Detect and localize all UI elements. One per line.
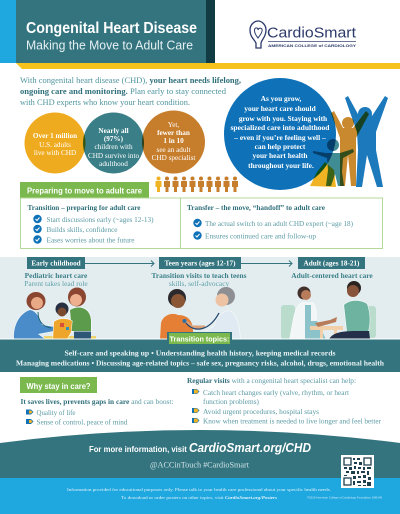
blue callout circle: your heart health	[253, 151, 307, 160]
column: transfer: Transfer – the move, “handoff” to adult care	[187, 203, 325, 212]
intro text	[20, 75, 241, 107]
stat circle: fewer than 1 in 10: see an adult	[157, 146, 190, 154]
topics text	[16, 348, 385, 368]
heading tab: Preparing to move to adult care	[27, 186, 143, 196]
stat circle: nearly all: children with	[94, 143, 133, 151]
illustration: teen and doctor	[160, 287, 240, 339]
blue callout circle: your heart care should	[244, 104, 317, 113]
social handles: @ACCinTouch #CardioSmart	[150, 460, 250, 470]
stage label: adult: Adult (ages 18-21)	[304, 260, 360, 268]
panel: why stay in care: It saves lives, prevents gaps in care and can boost:	[20, 397, 174, 406]
logo: CardioSmart	[250, 21, 356, 48]
family silhouettes	[310, 96, 388, 187]
stat circle: fewer than 1 in 10: Yet,	[168, 121, 179, 129]
logo: CardioSmart: CardioSmart	[267, 26, 356, 42]
stat circle: nearly all: (97%)	[104, 135, 124, 143]
heading tag	[167, 332, 232, 345]
blue callout circle: grow with you. Staying with	[239, 114, 327, 123]
panel: regular visits: Avoid urgent procedures, hospital stays	[203, 407, 319, 416]
column: transfer	[187, 203, 353, 240]
topics text: Managing medications • Discussing age-related topics – safe sex, pregnancy risks, alcohol, drugs, emotional health	[16, 358, 385, 368]
icon row: ten people	[156, 176, 238, 192]
panel: regular visits: Catch heart changes early (valve, rhythm, or heart	[203, 388, 350, 397]
heading tab	[20, 182, 149, 198]
stat circle: over 1 million: U.S. adults	[39, 141, 71, 149]
panel: regular visits: function problems)	[203, 397, 259, 406]
stage text: transition visits	[152, 271, 247, 288]
column: transition: Builds skills, confidence	[46, 225, 118, 234]
orange adult	[331, 111, 369, 186]
stat circle: fewer than 1 in 10: 1 in 10	[163, 137, 184, 145]
stage label: early childhood	[27, 257, 85, 269]
stage label: early childhood: Early childhood	[31, 260, 81, 268]
column: transition	[28, 203, 154, 244]
copyright: ©2026 American College of Cardiology Foundation 26M149	[307, 496, 383, 500]
stat circle: nearly all	[83, 112, 144, 174]
footer panel	[0, 430, 400, 514]
intro text: ongoing care and monitoring. Plan early to stay connected	[20, 86, 227, 96]
heading tag: Why stay in care?	[26, 381, 90, 391]
title: Congenital Heart Disease	[26, 20, 197, 37]
disclaimer: To download or order posters on other topics, visit CardioSmart.org/Posters	[121, 495, 277, 501]
topics text: Self-care and speaking up • Understanding health history, keeping medical records	[64, 348, 336, 358]
panel: regular visits: Know when treatment is needed to live longer and feel better	[203, 416, 381, 426]
heading tag	[20, 377, 97, 393]
column: transition: Start discussions early (~ages 12-13)	[46, 215, 154, 224]
panel: why stay in care: Quality of life	[36, 408, 76, 417]
stage label: adult	[298, 257, 365, 269]
blue callout circle	[224, 78, 336, 190]
illustration: doctor and adult patient	[281, 281, 376, 339]
call to action: For more information, visit CardioSmart.org/CHD	[89, 440, 312, 455]
blue callout circle: – even if you’re feeling well –	[233, 133, 326, 142]
disclaimer	[67, 487, 331, 501]
panel: why stay in care: Sense of control, peace of mind	[36, 418, 128, 426]
panel: why stay in care	[20, 377, 174, 426]
arrow	[85, 260, 154, 266]
stat circle: over 1 million: Over 1 million	[33, 132, 77, 140]
stage text: pediatric: Parent takes lead role	[24, 279, 88, 288]
panel: regular visits	[187, 376, 381, 426]
logo: CardioSmart: AMERICAN COLLEGE of CARDIOLOGY	[268, 43, 356, 48]
yellow toddler	[310, 162, 336, 187]
arrow	[241, 260, 292, 266]
stat circle: nearly all: Nearly all	[98, 127, 129, 135]
stage text: pediatric	[24, 271, 88, 288]
stat circle: nearly all: adulthood	[99, 160, 128, 168]
title	[26, 20, 197, 52]
stat circle: fewer than 1 in 10: CHD specialist	[152, 154, 195, 162]
blue callout circle: specialized care into adulthood	[230, 123, 330, 132]
column: transition: Eases worries about the future	[46, 236, 135, 244]
stage label: teen years: Teen years (ages 12-17)	[164, 260, 236, 268]
panel: transition topics	[0, 332, 400, 372]
blue callout circle: As you grow,	[261, 94, 302, 103]
intro text: With congenital heart disease (CHD), your heart needs lifelong,	[20, 75, 241, 85]
stage text: pediatric: Pediatric heart care	[25, 271, 88, 280]
stage label: teen years	[159, 257, 241, 269]
stat circle: fewer than 1 in 10	[142, 110, 205, 174]
stat circle: over 1 million	[24, 112, 86, 174]
blue callout circle: can help protect	[255, 142, 306, 151]
header banner	[0, 0, 400, 69]
blue adult	[345, 96, 388, 187]
column: transfer: Ensures continued care and follow-up	[205, 232, 316, 240]
stage text: adult-centered: Adult-centered heart care	[291, 271, 373, 280]
stat circle: nearly all: CHD survive into	[88, 152, 139, 160]
blue callout circle: throughout your life.	[248, 161, 314, 170]
stat circle: fewer than 1 in 10: fewer than	[157, 129, 190, 137]
intro text: with CHD experts who know your heart condition.	[20, 97, 190, 107]
title: Making the Move to Adult Care	[26, 38, 193, 52]
stage text: transition visits: Transition visits to teach teens	[152, 271, 247, 280]
illustration: nurse, child and parent	[14, 288, 96, 339]
QR code	[341, 455, 374, 488]
disclaimer: Information provided for educational purposes only. Please talk to your health care professional about your specific health needs.	[67, 487, 331, 492]
teal child	[313, 139, 354, 186]
column: transition: Transition – preparing for adult care	[28, 203, 141, 212]
stage text: transition visits: skills, self-advocacy	[169, 279, 229, 288]
heading tag: Transition topics:	[170, 334, 229, 344]
stat circle: over 1 million: live with CHD	[34, 149, 76, 157]
panel: timeline	[0, 257, 400, 340]
column: transfer: The actual switch to an adult CHD expert (~age 18)	[205, 219, 353, 228]
panel: regular visits: Regular visits with a congenital heart specialist can help:	[187, 376, 356, 385]
panel: preparing to move	[20, 182, 382, 248]
